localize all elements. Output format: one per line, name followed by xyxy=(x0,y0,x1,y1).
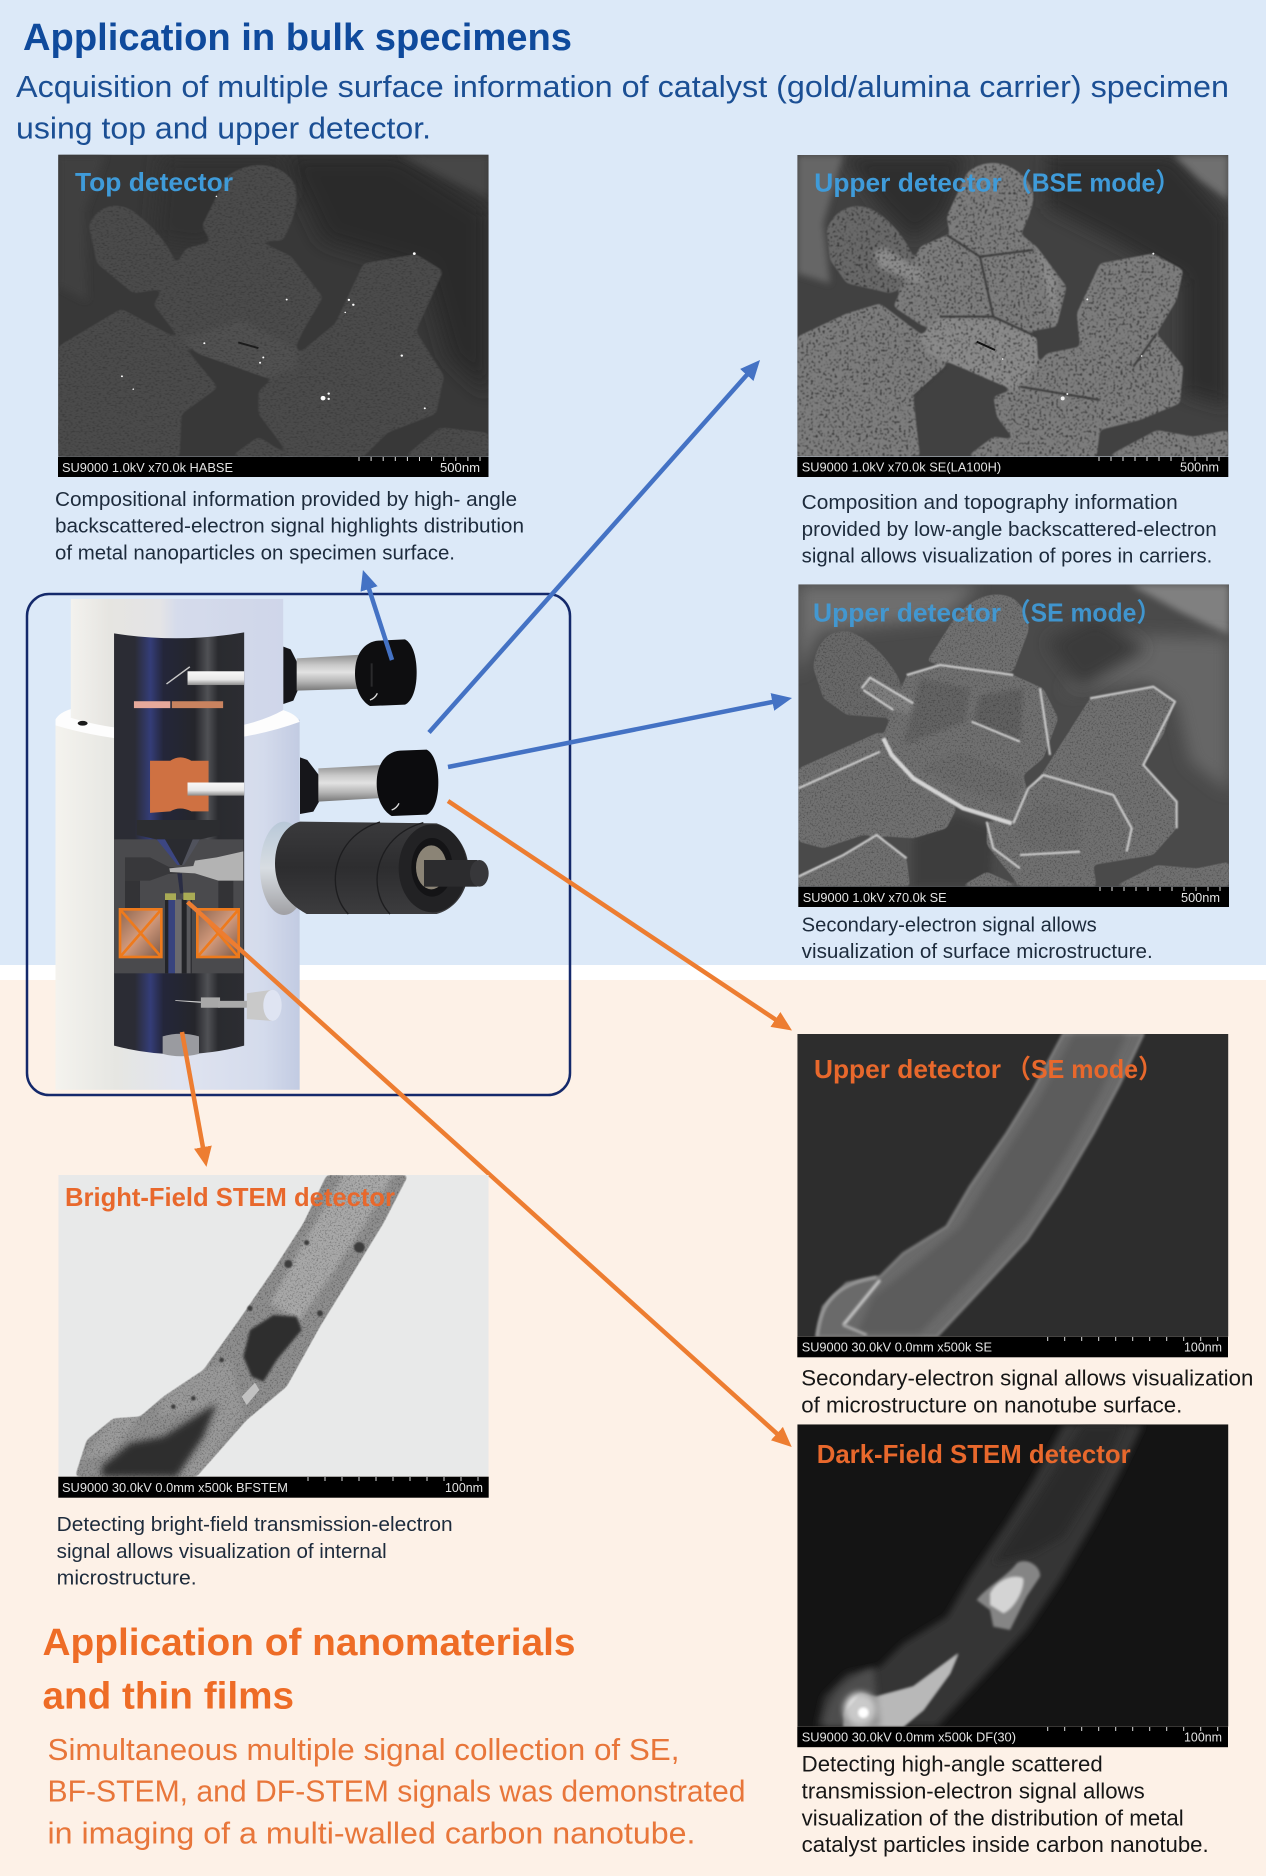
upper detector housing xyxy=(300,750,438,816)
caption: upper detector BSE: Composition and topography information xyxy=(802,492,1178,514)
top detector housing xyxy=(283,639,417,706)
title: nanomaterials and thin films xyxy=(42,1622,576,1718)
side detector housing xyxy=(260,822,489,915)
arrow: dark-field detector to DF image xyxy=(188,902,784,1440)
arrow: top detector to top image xyxy=(366,580,392,660)
diagram: external detector housings xyxy=(260,639,489,915)
text block: nanomaterials intro: BF-STEM, and DF-STEM signals was demonstrated xyxy=(48,1774,746,1809)
image info bar xyxy=(797,457,1228,477)
caption: dark-field STEM xyxy=(802,1752,1209,1857)
image info bar: 100nm xyxy=(445,1480,483,1495)
arrow: upper detector to SE image xyxy=(448,700,782,767)
panel: upper detector SE mode, nanotube xyxy=(797,1034,1253,1418)
label: nanotube SE: Upper detector xyxy=(814,1054,1001,1084)
caption: top detector xyxy=(55,489,524,564)
detector diagram frame xyxy=(27,594,570,1095)
caption: upper detector SE bulk: visualization of surface microstructure. xyxy=(802,941,1153,963)
scan plate xyxy=(134,701,223,708)
label: upper detector BSE: Upper detector xyxy=(814,168,1002,198)
panel: top detector xyxy=(55,155,524,564)
caption: top detector: backscattered-electron signal highlights distribution xyxy=(55,516,524,538)
micrograph: upper detector BSE xyxy=(797,155,1228,457)
text block: nanomaterials intro xyxy=(48,1732,746,1850)
objective block xyxy=(114,839,243,973)
panel: upper detector SE mode, bulk xyxy=(798,584,1229,963)
title: nanomaterials and thin films: Application of nanomaterials xyxy=(42,1622,576,1664)
caption: dark-field STEM: catalyst particles inside carbon nanotube. xyxy=(802,1832,1209,1857)
micrograph: upper detector SE bulk xyxy=(798,584,1229,887)
image info bar: SU9000 30.0kV 0.0mm x500k SE xyxy=(802,1340,992,1355)
lower needle detector xyxy=(175,990,282,1021)
arrow: upper detector to nanotube SE image xyxy=(448,801,784,1025)
side electron detector needle xyxy=(169,851,243,881)
caption: bright-field STEM: microstructure. xyxy=(57,1568,197,1590)
image info bar: SU9000 30.0kV 0.0mm x500k BFSTEM xyxy=(62,1480,288,1495)
detector chips xyxy=(165,893,195,900)
condenser lens xyxy=(150,757,209,813)
image info bar: SU9000 1.0kV x70.0k SE xyxy=(803,890,947,905)
image info bar: SU9000 30.0kV 0.0mm x500k DF(30) xyxy=(802,1730,1016,1745)
label: upper detector BSE xyxy=(814,168,1180,198)
image info bar: 500nm xyxy=(440,460,480,475)
label: top detector: Top detector xyxy=(75,167,233,197)
caption: dark-field STEM: transmission-electron signal allows xyxy=(802,1778,1145,1804)
image info bar: 500nm xyxy=(1181,890,1220,905)
label: bright-field STEM: Bright-Field STEM detector xyxy=(65,1182,395,1212)
image info bar: SU9000 1.0kV x70.0k SE(LA100H) xyxy=(802,460,1001,475)
arrow: bright-field detector to BF image xyxy=(182,1032,205,1157)
diagram: detector column cutaway xyxy=(55,599,300,1090)
caption: upper detector SE bulk: Secondary-electron signal allows xyxy=(802,915,1097,937)
image info bar xyxy=(58,1477,489,1498)
label: dark-field STEM: Dark-Field STEM detector xyxy=(817,1439,1131,1469)
caption: nanotube SE xyxy=(801,1366,1253,1418)
title: bulk specimens: Application in bulk specimens xyxy=(23,17,572,59)
title: nanomaterials and thin films: and thin films xyxy=(42,1676,294,1718)
cutaway window xyxy=(114,632,282,1056)
micrograph: bright-field STEM xyxy=(58,1175,489,1477)
panel: bright-field STEM xyxy=(57,1175,489,1590)
caption: dark-field STEM: visualization of the distribution of metal xyxy=(802,1805,1184,1830)
bright-field detector xyxy=(163,1034,199,1056)
micrograph: top detector xyxy=(58,155,489,457)
label: upper detector BSE: （BSE mode） xyxy=(1007,168,1180,198)
upper column xyxy=(71,599,283,730)
image info bar xyxy=(797,1727,1228,1747)
image info bar: 100nm xyxy=(1184,1730,1222,1745)
image info bar: SU9000 1.0kV x70.0k HABSE xyxy=(62,460,233,475)
text block: bulk specimens intro: using top and upper detector. xyxy=(16,110,431,146)
caption: upper detector SE bulk xyxy=(802,915,1153,963)
inner bore shafts xyxy=(125,873,233,973)
image info bar: 500nm xyxy=(1180,460,1219,475)
caption: bright-field STEM xyxy=(57,1514,453,1590)
label: upper detector SE bulk: （SE mode） xyxy=(1006,598,1161,628)
caption: dark-field STEM: Detecting high-angle scattered xyxy=(802,1752,1103,1777)
image info bar: 100nm xyxy=(1184,1340,1222,1355)
caption: top detector: Compositional information provided by high- angle xyxy=(55,489,517,511)
arrow: upper detector to BSE image xyxy=(429,368,753,732)
micrograph: nanotube SE xyxy=(797,1034,1228,1337)
objective top cone xyxy=(137,820,220,865)
caption: bright-field STEM: Detecting bright-field transmission-electron xyxy=(57,1514,453,1536)
text block: nanomaterials intro: Simultaneous multiple signal collection of SE, xyxy=(48,1732,680,1767)
caption: top detector: of metal nanoparticles on specimen surface. xyxy=(55,542,455,564)
caption: upper detector BSE: signal allows visualization of pores in carriers. xyxy=(802,546,1212,568)
image info bar xyxy=(798,887,1229,907)
text block: bulk specimens intro: Acquisition of multiple surface information of catalyst (gold/alumina carrier) specimen xyxy=(16,69,1229,104)
caption: upper detector BSE: provided by low-angle backscattered-electron xyxy=(802,519,1217,541)
diagram: objective lens and coils xyxy=(114,820,243,973)
image info bar xyxy=(797,1337,1228,1357)
specimen chamber xyxy=(125,857,180,881)
image info bar xyxy=(58,457,488,477)
label: nanotube SE: （SE mode） xyxy=(1006,1054,1163,1084)
text block: nanomaterials intro: in imaging of a multi-walled carbon nanotube. xyxy=(48,1815,696,1850)
upper detector rod xyxy=(188,783,244,796)
label: nanotube SE xyxy=(814,1054,1163,1084)
label: upper detector SE bulk xyxy=(813,598,1161,628)
caption: nanotube SE: Secondary-electron signal allows visualization xyxy=(801,1366,1253,1391)
caption: upper detector BSE xyxy=(802,492,1217,568)
caption: bright-field STEM: signal allows visualization of internal xyxy=(57,1541,387,1563)
label: upper detector SE bulk: Upper detector xyxy=(813,598,1001,628)
panel: upper detector BSE mode xyxy=(797,155,1228,568)
top detector rod xyxy=(166,667,244,685)
text block: bulk specimens intro xyxy=(16,69,1229,146)
panel: dark-field STEM xyxy=(797,1424,1228,1857)
lower column xyxy=(55,709,300,1090)
micrograph: dark-field STEM xyxy=(797,1424,1228,1727)
objective coils xyxy=(120,909,239,957)
caption: nanotube SE: of microstructure on nanotube surface. xyxy=(801,1393,1182,1418)
